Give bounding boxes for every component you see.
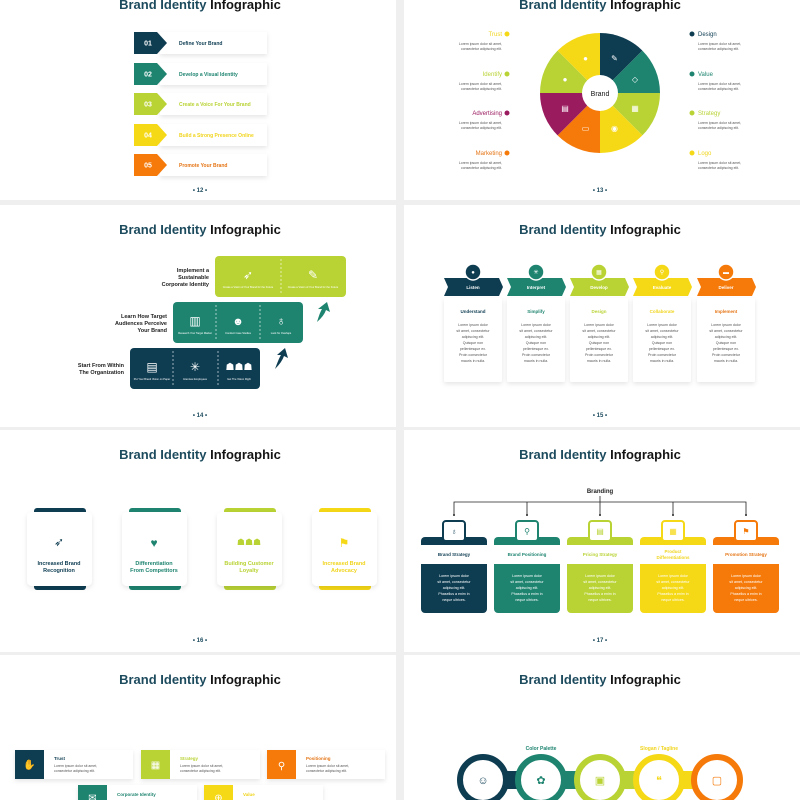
value cards: ✋ [23, 758, 36, 771]
branch cards: Brand Strategy [438, 552, 471, 557]
branch cards: Phasellus a enim in [657, 592, 689, 596]
panel: slide 15 process: Lorem ipsum dolor [711, 323, 742, 327]
card texts: Understand [460, 309, 486, 314]
panel: slide 15 process: Lorem ipsum dolor [458, 323, 489, 327]
step labels: The Organization [79, 370, 125, 376]
pie chart: Brand [591, 91, 609, 98]
branch cards: ♁ [451, 527, 457, 536]
benefit cards: Loyalty [239, 568, 260, 574]
benefit cards: ♥ [150, 536, 158, 550]
pie labels right: Value [698, 72, 714, 78]
branch cards: adipiscing elit. [516, 586, 538, 590]
value cards: Value [243, 792, 255, 797]
step: teal [173, 302, 303, 343]
panel: slide 15 process: mauris in nulla. [524, 359, 548, 363]
benefit cards: Increased Brand [37, 561, 81, 567]
chain rings [460, 757, 740, 800]
card texts [460, 309, 738, 314]
branch cards: ⚑ [742, 527, 750, 536]
branch cards: Lorem ipsum dolor [585, 574, 616, 578]
pie labels right: Strategy [698, 111, 720, 117]
panel: slide 17 branding tree [421, 447, 779, 644]
step: navy: ☗☗☗ [226, 362, 252, 373]
value cards: Lorem ipsum dolor sit amet, [306, 764, 349, 768]
panel: slide 15 process: sit amet, consectetur [582, 329, 616, 333]
chevrons: ▦ [596, 270, 602, 276]
value cards [15, 750, 385, 800]
pie labels left: Identify [483, 72, 502, 78]
benefit cards: Advocacy [331, 568, 358, 574]
step list: 03 [144, 102, 152, 108]
pie chart: ◇ [632, 75, 639, 84]
panel: slide 16 benefits [27, 447, 377, 644]
panel: slide 15 process: Quisque non [463, 341, 483, 345]
pie labels left: consectetur adipiscing elit. [461, 166, 502, 170]
value cards: ⚲ [278, 761, 285, 772]
branch cards: Lorem ipsum dolor [512, 574, 543, 578]
step list: Develop a Visual Identity [179, 72, 238, 78]
chain rings: ✿ [536, 775, 546, 787]
step: navy: ▤ [146, 360, 158, 374]
panel: slide 15 process: Quisque non [716, 341, 736, 345]
page number: • 14 • [193, 413, 207, 419]
chevrons: Develop [590, 285, 608, 290]
pie labels left: consectetur adipiscing elit. [461, 47, 502, 51]
branch cards: sit amet, consectetur [510, 580, 544, 584]
pie labels right: Lorem ipsum dolor sit amet, [698, 121, 741, 125]
pie labels right: consectetur adipiscing elit. [698, 126, 739, 130]
page number: • 17 • [593, 638, 607, 644]
branch cards: Differentiations [656, 555, 690, 560]
pie chart: ● [583, 54, 588, 63]
chevrons: ▬ [723, 270, 729, 276]
branch cards: Phasellus a enim in [511, 592, 543, 596]
chevrons: Evaluate [653, 285, 672, 290]
step: lime: Create a Vision of Your Brand for the Future [288, 285, 339, 289]
panel: slide 15 process: Quisque non [589, 341, 609, 345]
pie chart: ▭ [582, 124, 589, 133]
panel: slide 15 process: adipiscing elit. [525, 335, 547, 339]
panel: slide 15 process: mauris in nulla. [587, 359, 611, 363]
title: Brand Identity Infographic [119, 447, 281, 462]
title: Brand Identity Infographic [519, 447, 681, 462]
step list: Promote Your Brand [179, 163, 227, 169]
pie labels left: Marketing [476, 151, 502, 157]
chain rings: ▢ [712, 775, 722, 787]
panel: slide 15 process: adipiscing elit. [651, 335, 673, 339]
value cards: Lorem ipsum dolor sit amet, [54, 764, 97, 768]
chain labels: Color Palette [526, 746, 557, 752]
cards [444, 298, 755, 382]
card texts: Implement [715, 309, 738, 314]
branch cards: neque ultrices. [515, 598, 539, 602]
step: navy [130, 348, 260, 389]
step list: 05 [144, 162, 152, 170]
card texts: Collaborate [650, 309, 675, 314]
page number: • 15 • [593, 413, 607, 419]
pie labels left: Lorem ipsum dolor sit amet, [459, 161, 502, 165]
benefit cards: Recognition [43, 568, 76, 574]
step list: Build a Strong Presence Online [179, 133, 254, 139]
page number: • 13 • [593, 188, 607, 194]
step labels: Start From Within [78, 363, 125, 369]
value cards: consectetur adipiscing elit. [180, 769, 221, 773]
branch cards: neque ultrices. [442, 598, 466, 602]
tree connectors [453, 489, 747, 516]
panel: slide 18 cards [15, 672, 385, 800]
value cards: Positioning [306, 756, 331, 761]
panel: slide 15 process: adipiscing elit. [588, 335, 610, 339]
chain rings: ❝ [656, 775, 662, 787]
panel: slide 15 process: Quisque non [652, 341, 672, 345]
step labels: Implement a [177, 268, 210, 274]
panel: slide 15 process: pellentesque ex. [649, 347, 675, 351]
panel: slide 15 process: Proin consectetur [648, 353, 677, 357]
step: teal: Research Your Target Market [178, 331, 212, 335]
panel: slide 15 process: adipiscing elit. [462, 335, 484, 339]
chevrons: ● [471, 270, 475, 276]
branch cards [421, 521, 779, 613]
step: lime: Create a Vision of Your Brand for the Future [223, 285, 274, 289]
branch cards: adipiscing elit. [589, 586, 611, 590]
step list [134, 32, 267, 176]
arrows [275, 302, 330, 369]
panel: slide 19 chain [460, 672, 740, 800]
benefit cards: ☗☗☗ [237, 537, 261, 547]
branch cards: Lorem ipsum dolor [731, 574, 762, 578]
chevrons [444, 264, 756, 296]
value cards: Strategy [180, 756, 199, 761]
chevrons: Deliver [718, 285, 734, 290]
branch cards: ▦ [669, 527, 677, 536]
branch cards: sit amet, consectetur [656, 580, 690, 584]
branch cards: adipiscing elit. [735, 586, 757, 590]
benefit cards [27, 508, 377, 590]
benefit cards: ⚑ [339, 536, 349, 550]
title: Brand Identity Infographic [119, 222, 281, 237]
step list: Define Your Brand [179, 41, 222, 47]
benefit cards: Building Customer [224, 561, 274, 567]
title: Brand Identity Infographic [519, 672, 681, 687]
panel: slide 13 pie [459, 0, 741, 194]
branch cards: Phasellus a enim in [438, 592, 470, 596]
step: lime [215, 256, 346, 297]
branch cards: neque ultrices. [661, 598, 685, 602]
benefit cards: ➶ [54, 535, 64, 549]
step labels: Corporate Identity [162, 282, 210, 288]
step labels: Audiences Perceive [115, 321, 167, 327]
step list: Create a Voice For Your Brand [179, 102, 251, 108]
pie chart: ▦ [631, 104, 639, 113]
chain rings: ▣ [595, 775, 605, 787]
pie labels right: Lorem ipsum dolor sit amet, [698, 161, 741, 165]
pie labels right: Logo [698, 151, 712, 157]
branch cards: ⚲ [524, 527, 530, 536]
branch cards: Phasellus a enim in [730, 592, 762, 596]
branch cards: sit amet, consectetur [583, 580, 617, 584]
chain rings: ☺ [477, 775, 489, 787]
pie chart: ● [563, 75, 568, 84]
pie chart: ✎ [611, 54, 618, 63]
chevrons: Interpret [527, 285, 546, 290]
panel: slide 15 process: Proin consectetur [712, 353, 741, 357]
branch cards: Product [664, 549, 682, 554]
panel: slide 14 stairs [78, 222, 346, 419]
step: teal: Look for Overlaps [271, 331, 292, 335]
panel: slide 15 process: pellentesque ex. [713, 347, 739, 351]
step: navy: Interview Employees [183, 377, 208, 381]
panel: slide 15 process: Proin consectetur [522, 353, 551, 357]
panel: slide 12 steps [119, 0, 281, 194]
branch cards: ▤ [596, 527, 604, 536]
panel: slide 15 process: Lorem ipsum dolor [584, 323, 615, 327]
step: navy: Put Your Brand Vision on Paper [134, 377, 170, 381]
step: teal: ♁ [276, 314, 286, 328]
benefit cards: Differentiation [135, 561, 173, 567]
branch cards: sit amet, consectetur [437, 580, 471, 584]
pie labels right: consectetur adipiscing elit. [698, 87, 739, 91]
panel: slide 15 process: pellentesque ex. [460, 347, 486, 351]
panel: slide 15 process: Proin consectetur [459, 353, 488, 357]
panel: slide 15 process: Proin consectetur [585, 353, 614, 357]
chevrons: ✳ [533, 269, 539, 276]
pie labels left: Lorem ipsum dolor sit amet, [459, 82, 502, 86]
step labels: Learn How Target [121, 314, 167, 320]
step: lime: ➶ [243, 268, 253, 282]
benefit cards: From Competitors [130, 568, 178, 574]
branch cards: adipiscing elit. [443, 586, 465, 590]
value cards: consectetur adipiscing elit. [306, 769, 347, 773]
panel: slide 15 process: sit amet, consectetur [519, 329, 553, 333]
panel: slide 15 process: mauris in nulla. [461, 359, 485, 363]
value cards: Corporate Identity [117, 792, 156, 797]
pie labels right: consectetur adipiscing elit. [698, 166, 739, 170]
step: navy: Get The Vision Right [227, 377, 251, 381]
chevrons: ⚲ [660, 269, 664, 276]
tree connectors: Branding [587, 489, 613, 495]
chevrons: Listen [466, 285, 480, 290]
benefit cards: Increased Brand [322, 561, 366, 567]
panel: slide 15 process: pellentesque ex. [586, 347, 612, 351]
pie labels left: Lorem ipsum dolor sit amet, [459, 42, 502, 46]
title: Brand Identity Infographic [119, 672, 281, 687]
pie chart [540, 33, 660, 153]
pie labels right [690, 32, 741, 170]
pie labels right: Lorem ipsum dolor sit amet, [698, 82, 741, 86]
value cards: Trust [54, 756, 66, 761]
panel: slide 15 process: mauris in nulla. [650, 359, 674, 363]
card texts: Design [591, 309, 607, 314]
pie labels right: Design [698, 32, 717, 38]
step: teal: Conduct Case Studies [225, 331, 252, 335]
branch cards: Phasellus a enim in [584, 592, 616, 596]
step list: 02 [144, 72, 152, 78]
panel: slide 15 process: pellentesque ex. [523, 347, 549, 351]
panel: slide 15 process: sit amet, consectetur [709, 329, 743, 333]
panel: slide 15 process [444, 222, 756, 419]
step list: 01 [144, 40, 152, 48]
branch cards: Pricing Strategy [583, 552, 618, 557]
step labels [78, 268, 210, 376]
pie labels left: Lorem ipsum dolor sit amet, [459, 121, 502, 125]
branch cards: Promotion Strategy [725, 552, 767, 557]
step: teal: ☻ [232, 316, 244, 328]
step labels: Sustainable [178, 275, 209, 281]
pie labels left: consectetur adipiscing elit. [461, 87, 502, 91]
panel: slide 15 process: sit amet, consectetur [456, 329, 490, 333]
pie labels right: consectetur adipiscing elit. [698, 47, 739, 51]
step: lime: ✎ [308, 268, 318, 282]
card texts: Simplify [527, 309, 545, 314]
panel: slide 15 process: Lorem ipsum dolor [521, 323, 552, 327]
step: teal: ▥ [189, 314, 201, 328]
branch cards: sit amet, consectetur [729, 580, 763, 584]
branch cards: Lorem ipsum dolor [439, 574, 470, 578]
page number: • 16 • [193, 638, 207, 644]
pie chart: ◉ [611, 124, 618, 133]
branch cards: adipiscing elit. [662, 586, 684, 590]
pie labels left: consectetur adipiscing elit. [461, 126, 502, 130]
panel: slide 15 process: adipiscing elit. [715, 335, 737, 339]
branch cards: neque ultrices. [588, 598, 612, 602]
branch cards: Brand Positioning [508, 552, 547, 557]
value cards: ▦ [151, 760, 160, 771]
step labels: Your Brand [137, 328, 167, 334]
pie labels left: Trust [489, 32, 502, 38]
value cards: consectetur adipiscing elit. [54, 769, 95, 773]
page number: • 12 • [193, 188, 207, 194]
step: navy: ✳ [190, 360, 200, 374]
chain labels [526, 746, 678, 752]
panel: slide 15 process: sit amet, consectetur [645, 329, 679, 333]
panel: slide 15 process: mauris in nulla. [714, 359, 738, 363]
panel: slide 15 process: Quisque non [526, 341, 546, 345]
value cards: Lorem ipsum dolor sit amet, [180, 764, 223, 768]
pie chart: ▤ [561, 104, 569, 113]
pie labels right: Lorem ipsum dolor sit amet, [698, 42, 741, 46]
title: Brand Identity Infographic [519, 222, 681, 237]
chain labels: Slogan / Tagline [640, 746, 678, 752]
pie labels left [459, 32, 510, 170]
pie labels left: Advertising [472, 111, 502, 117]
panel: slide 15 process: Lorem ipsum dolor [647, 323, 678, 327]
branch cards: Lorem ipsum dolor [658, 574, 689, 578]
step list: 04 [144, 132, 152, 140]
branch cards: neque ultrices. [734, 598, 758, 602]
